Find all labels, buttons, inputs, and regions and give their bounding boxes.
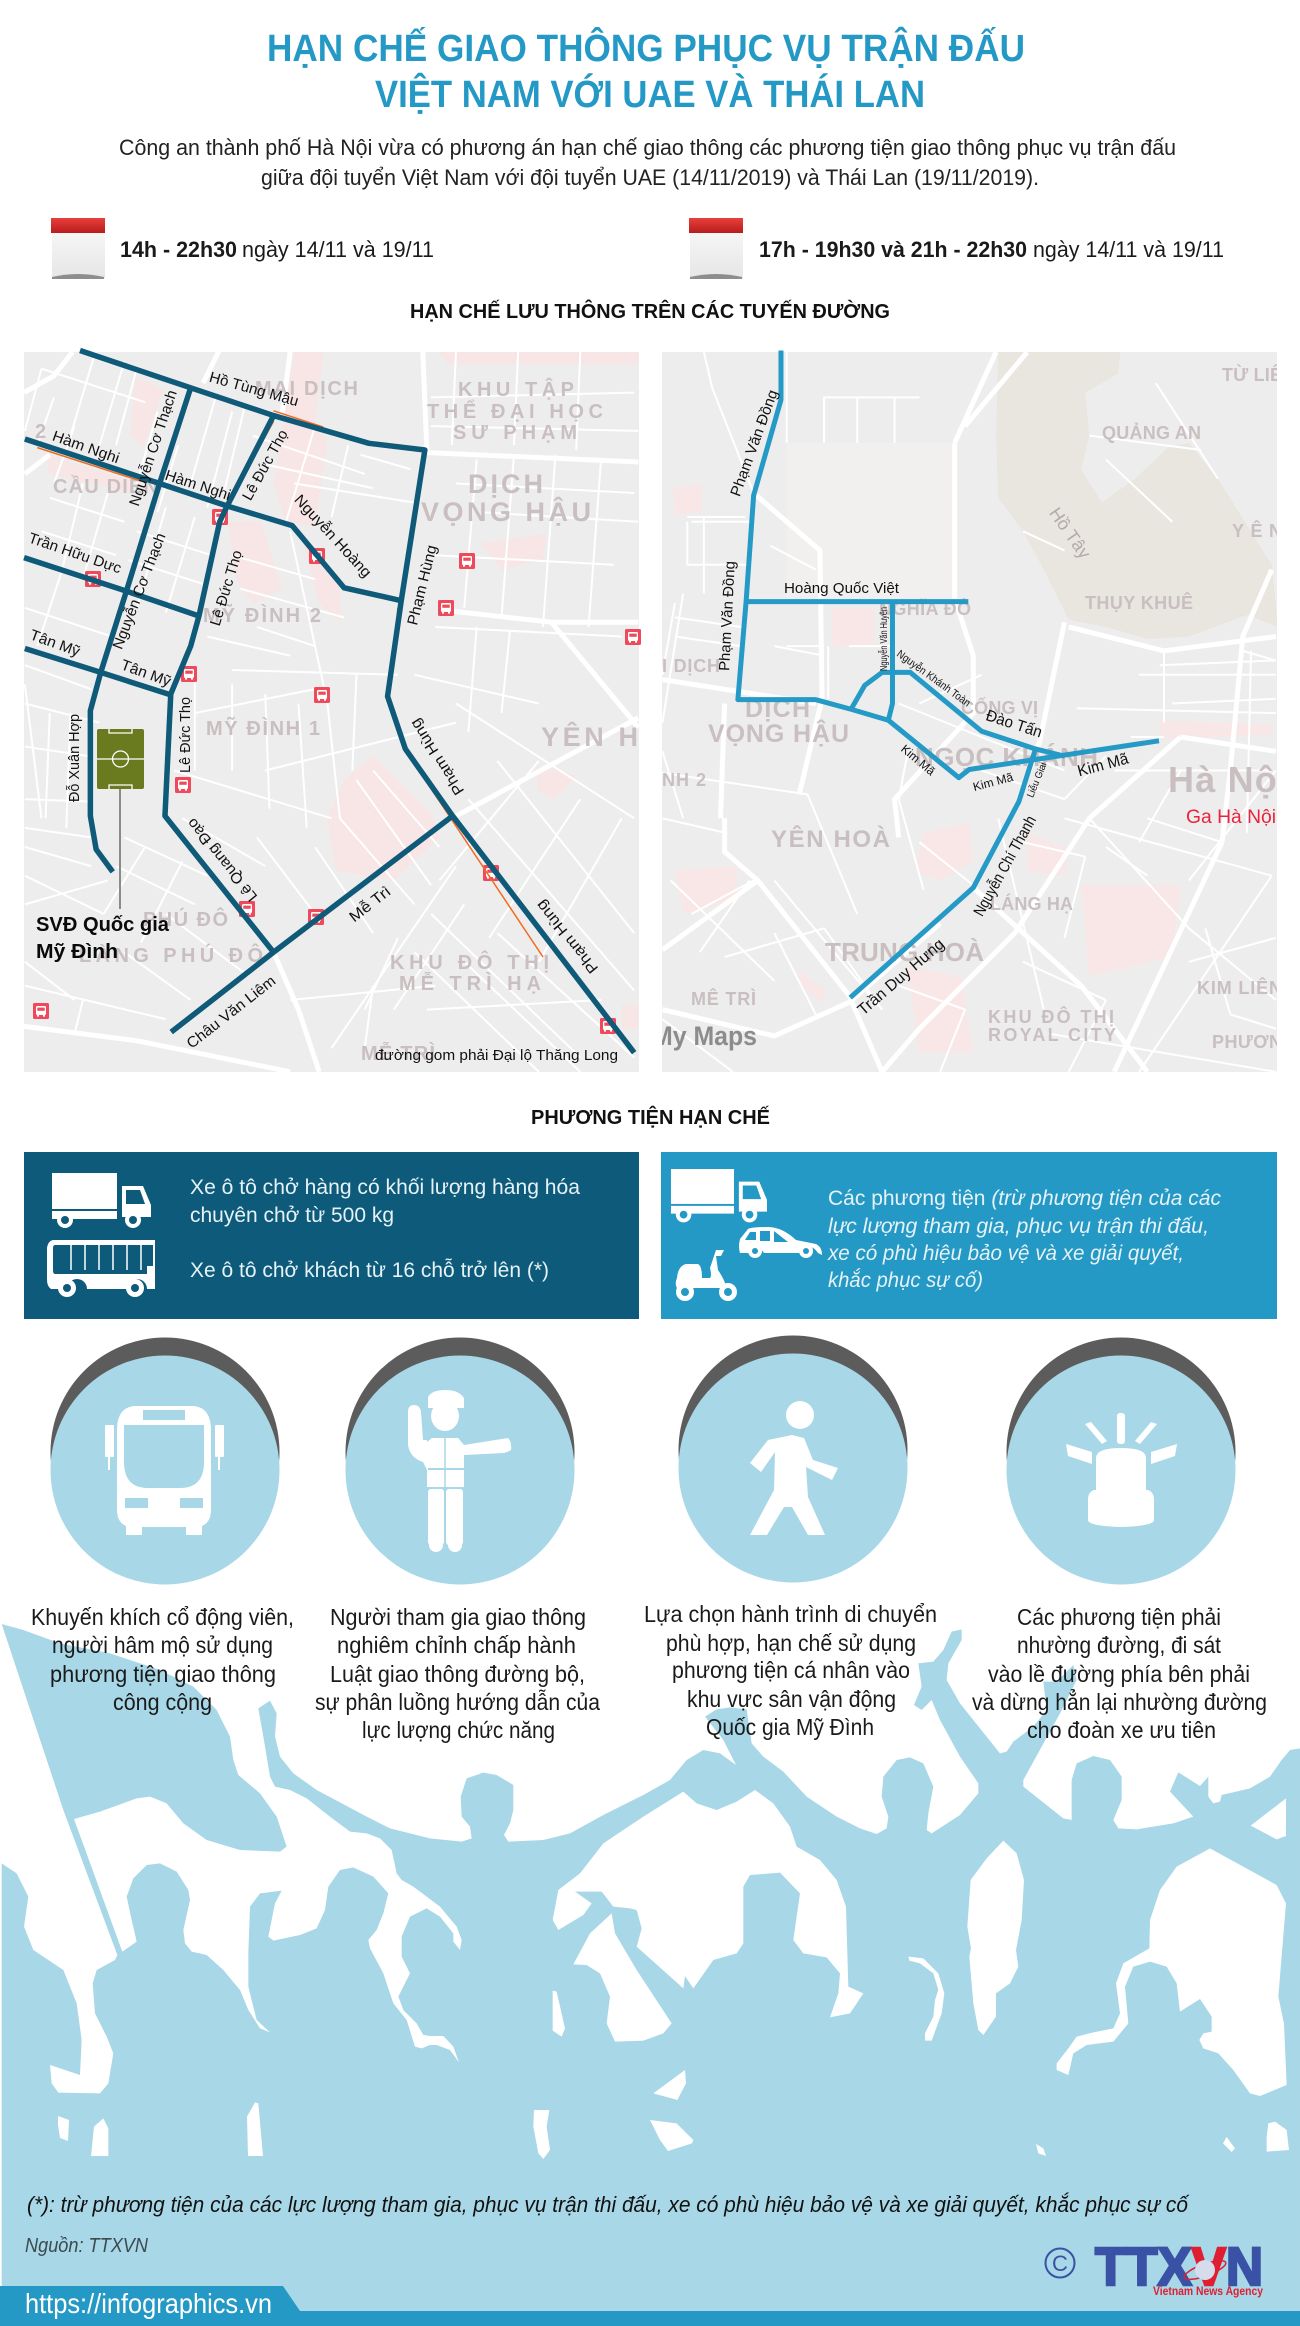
text: all vehicles except: khắc phục sự cố) xyxy=(828,1269,983,1292)
road labels: My Dinh map: Châu Văn Liêm xyxy=(184,972,279,1052)
title: VIỆT NAM VỚI UAE VÀ THÁI LAN xyxy=(375,72,925,116)
panel: map Cau Giay - Dong Da area: KHU ĐÔ THỊ xyxy=(988,1006,1114,1027)
crowd silhouette xyxy=(2,1624,1300,2326)
text: obey traffic law: sự phân luồng hướng dẫn của xyxy=(315,1689,600,1715)
footer bar with url: https://infographics.vn xyxy=(25,2288,272,2319)
text: all vehicles except xyxy=(827,1187,1221,1292)
text: trucks and coaches: Xe ô tô chở khách từ 16 chỗ trở lên (*) xyxy=(190,1259,549,1282)
title: HẠN CHẾ GIAO THÔNG PHỤC VỤ TRẬN ĐẤU xyxy=(267,25,1025,70)
panel: map Cau Giay - Dong Da area: LÁNG HẠ xyxy=(990,893,1073,914)
panel: map My Dinh area: VỌNG HẬU xyxy=(421,496,591,527)
road labels: My Dinh map: Lê Đức Thọ xyxy=(177,697,194,773)
time range left xyxy=(120,237,434,262)
road labels: Cau Giay map: Kim Mã xyxy=(1076,751,1131,780)
panel: dark vehicles xyxy=(24,1152,639,1319)
road labels: My Dinh map: Hàm Nghi xyxy=(163,467,233,504)
title xyxy=(267,25,1025,116)
panel: map Cau Giay - Dong Da area: NGỌC KHÁNH xyxy=(915,742,1098,772)
panel: map My Dinh area: MỄ TRÌ HẠ xyxy=(399,972,541,995)
panel: map Cau Giay - Dong Da area: Ga Hà Nội xyxy=(1186,807,1276,828)
icon: scooter xyxy=(676,1250,737,1301)
text: give way: nhường đường, đi sát xyxy=(1017,1632,1222,1658)
advice column: public transport xyxy=(31,1338,294,1715)
panel: map My Dinh area: THỂ ĐẠI HỌC xyxy=(427,400,603,423)
text: trucks and coaches: chuyên chở từ 500 kg xyxy=(190,1204,394,1227)
icon: truck xyxy=(671,1169,767,1222)
road labels: My Dinh map: Lê Quang Đạo xyxy=(184,815,261,905)
panel: map My Dinh area: 2 xyxy=(35,421,46,443)
panel: map Cau Giay - Dong Da area: YÊN HOÀ xyxy=(771,825,890,853)
road labels: Cau Giay map: Kim Mã xyxy=(898,742,938,778)
logo: TTXVN: Vietnam News Agency xyxy=(1153,2284,1263,2298)
road labels: Cau Giay map xyxy=(716,388,1131,1019)
stadium label: SVĐ Quốc gia xyxy=(36,914,170,936)
panel: map Cau Giay - Dong Da area: TỪ LIÊ xyxy=(1222,364,1282,385)
text: obey traffic law xyxy=(315,1604,600,1743)
road labels: Cau Giay map: Nguyễn Văn Huyên xyxy=(877,607,890,671)
panel: map Cau Giay - Dong Da area: QUẢNG AN xyxy=(1102,422,1201,443)
text: public transport: công cộng xyxy=(113,1689,212,1715)
road labels: Cau Giay map: Nguyễn Khánh Toàn xyxy=(894,647,973,710)
text: public transport: Khuyến khích cổ động viên, xyxy=(31,1604,294,1630)
road labels: My Dinh map: Tân Mỹ xyxy=(27,627,83,661)
logo: TTXVN: TTXVN xyxy=(1095,2237,1263,2297)
road labels: Cau Giay map: Đào Tấn xyxy=(984,707,1044,742)
panel: map My Dinh area: MỸ ĐÌNH 1 xyxy=(206,717,320,740)
text: give way: cho đoàn xe ưu tiên xyxy=(1027,1717,1216,1743)
road labels: Cau Giay map: Trần Duy Hưng xyxy=(855,936,948,1019)
road labels: Cau Giay map: Hoàng Quốc Việt xyxy=(784,580,900,597)
advice column: give way xyxy=(972,1338,1267,1743)
panel: map My Dinh area: MỄ TRÌ xyxy=(361,1042,435,1065)
footnote: (*): trừ phương tiện của các lực lượng tham gia, phục vụ trận thi đấu, xe có phù hiệu bảo vệ và xe giải quyết, khắc phục sự cố xyxy=(27,2192,1190,2217)
intro paragraph: Công an thành phố Hà Nội vừa có phương án hạn chế giao thông các phương tiện giao thông phục vụ trận đấu xyxy=(119,135,1176,160)
text: give way: Các phương tiện phải xyxy=(1017,1604,1221,1630)
panel: map My Dinh area: CẦU DIỄN xyxy=(53,475,158,498)
text: give way: vào lề đường phía bên phải xyxy=(988,1661,1250,1687)
time range right: 17h - 19h30 và 21h - 22h30 xyxy=(759,237,1027,262)
panel: map Cau Giay - Dong Da area: NH 2 xyxy=(662,770,706,790)
road labels: My Dinh map: Mễ Trì xyxy=(346,883,394,926)
icon: truck xyxy=(52,1173,151,1228)
panel: map Cau Giay - Dong Da area: KIM LIÊN xyxy=(1197,977,1282,998)
road labels: My Dinh map: Tân Mỹ xyxy=(118,657,174,691)
panel: map My Dinh area: LÀNG PHÚ ĐÔ xyxy=(79,943,263,967)
panel: map Cau Giay - Dong Da area: THỤY KHUÊ xyxy=(1085,592,1193,613)
road labels: My Dinh map xyxy=(26,369,618,1064)
road labels: My Dinh map: Lê Đức Thọ xyxy=(207,548,246,628)
text: give way: và dừng hẳn lại nhường đường xyxy=(972,1687,1267,1715)
icon: coach bus xyxy=(47,1240,155,1297)
panel: map Cau Giay - Dong Da area: MÊ TRÌ xyxy=(691,988,756,1009)
icon: bus front xyxy=(105,1406,224,1535)
icon: stadium xyxy=(97,729,144,909)
time range left: ngày 14/11 và 19/11 xyxy=(242,237,434,262)
panel: map My Dinh area: YÊN H xyxy=(541,721,638,752)
road labels: Cau Giay map: Liễu Giai xyxy=(1024,760,1049,799)
panel: map Cau Giay - Dong Da area: CỐNG VỊ xyxy=(961,697,1038,718)
text: public transport: phương tiện giao thông xyxy=(50,1661,276,1687)
text: plan route: Lựa chọn hành trình di chuyển xyxy=(644,1601,937,1627)
panel: map My Dinh area xyxy=(24,350,641,1072)
road labels: My Dinh map: Phạm Hùng xyxy=(407,715,468,798)
road labels: My Dinh map: Đỗ Xuân Hợp xyxy=(66,714,83,802)
panel: map Cau Giay - Dong Da area: YÊN xyxy=(1232,520,1282,541)
panel: map Cau Giay - Dong Da area: NGHĨA ĐÔ xyxy=(879,598,971,619)
text: plan route: phương tiện cá nhân vào xyxy=(672,1657,910,1683)
panel: map My Dinh area: DỊCH xyxy=(468,469,543,499)
panel: map My Dinh area: KHU ĐÔ THỊ xyxy=(390,950,549,974)
footer bar with url xyxy=(0,2286,1300,2326)
road labels: Cau Giay map: Phạm Văn Đồng xyxy=(716,561,739,671)
intro paragraph xyxy=(119,135,1176,190)
road labels: My Dinh map: Nguyễn Hoàng xyxy=(291,492,375,581)
panel: map My Dinh area: MAI DỊCH xyxy=(255,378,358,400)
panel: map Cau Giay - Dong Da area xyxy=(652,351,1288,1072)
heading: restricted routes: HẠN CHẾ LƯU THÔNG TRÊN CÁC TUYẾN ĐƯỜNG xyxy=(410,299,890,323)
source: Nguồn: TTXVN xyxy=(25,2235,149,2257)
road labels: My Dinh map: Phạm Hùng xyxy=(404,543,441,627)
icon: siren xyxy=(1066,1413,1177,1527)
text: obey traffic law: Người tham gia giao thông xyxy=(330,1604,586,1630)
panel: map My Dinh area: SƯ PHẠM xyxy=(453,422,577,444)
advice column: obey traffic law xyxy=(315,1338,600,1743)
icon: pedestrian xyxy=(750,1401,838,1535)
road labels: My Dinh map: Hồ Tùng Mậu xyxy=(207,369,300,410)
panel: light vehicles xyxy=(661,1152,1277,1319)
panel: map Cau Giay - Dong Da area: VỌNG HẬU xyxy=(708,718,849,748)
road labels: Cau Giay map: Kim Mã xyxy=(971,770,1015,794)
logo: TTXVN: C xyxy=(1052,2251,1068,2276)
bus stop markers xyxy=(33,509,641,1034)
text: all vehicles except: lực lượng tham gia, phục vụ trận thi đấu, xyxy=(828,1215,1209,1238)
icon: traffic officer xyxy=(408,1390,511,1552)
text: obey traffic law: nghiêm chỉnh chấp hành xyxy=(337,1632,576,1658)
panel: map Cau Giay - Dong Da area: Hà Nội xyxy=(1168,759,1288,800)
road labels: Cau Giay map: Nguyễn Chí Thanh xyxy=(969,812,1040,919)
icon: car xyxy=(739,1227,822,1258)
road labels: My Dinh map: Nguyễn Cơ Thạch xyxy=(126,388,181,508)
restricted roads xyxy=(738,351,1159,998)
stadium label xyxy=(36,914,170,963)
panel: map Cau Giay - Dong Da area: TRUNG HOÀ xyxy=(825,937,984,967)
icon: calendar left xyxy=(51,218,105,279)
panel: map Cau Giay - Dong Da area: My Maps xyxy=(652,1021,757,1051)
stadium label: Mỹ Đình xyxy=(36,941,118,963)
panel: map Cau Giay - Dong Da area: Hồ Tây xyxy=(1045,504,1095,562)
road labels: My Dinh map: đường gom phải Đại lộ Thăng Long xyxy=(375,1047,618,1064)
time range right: ngày 14/11 và 19/11 xyxy=(1033,237,1224,262)
panel: map Cau Giay - Dong Da area: I DỊCH xyxy=(662,656,720,676)
panel: map My Dinh area: MỸ ĐÌNH 2 xyxy=(203,604,321,627)
road labels: My Dinh map: Trần Hữu Dực xyxy=(26,530,124,577)
text: trucks and coaches: Xe ô tô chở hàng có khối lượng hàng hóa xyxy=(190,1176,580,1199)
panel: map Cau Giay - Dong Da area: ROYAL CITY xyxy=(988,1025,1116,1045)
text: public transport xyxy=(31,1604,294,1715)
text: trucks and coaches xyxy=(190,1176,580,1282)
panel: map My Dinh area: PHÚ ĐÔ xyxy=(143,907,228,931)
icon: calendar right xyxy=(689,218,743,279)
restricted roads xyxy=(24,351,634,1053)
time range right xyxy=(759,237,1224,262)
road labels: My Dinh map: Phạm Hùng xyxy=(533,897,602,977)
text: plan route: phù hợp, hạn chế sử dụng xyxy=(666,1630,916,1656)
road labels: My Dinh map: Lê Đức Thọ xyxy=(239,427,292,503)
advice column: plan route xyxy=(644,1336,937,1740)
panel: map Cau Giay - Dong Da area: DỊCH xyxy=(745,695,810,723)
text: all vehicles except: xe có phù hiệu bảo vệ và xe giải quyết, xyxy=(827,1242,1184,1265)
text: give way xyxy=(972,1604,1267,1743)
text: plan route: Quốc gia Mỹ Đình xyxy=(706,1714,874,1740)
panel: map Cau Giay - Dong Da area: PHƯƠN xyxy=(1212,1032,1282,1052)
road labels: My Dinh map: Nguyễn Cơ Thạch xyxy=(109,531,169,652)
time range left: 14h - 22h30 xyxy=(120,237,237,262)
road labels: Cau Giay map: Phạm Văn Đồng xyxy=(727,388,782,499)
road labels: My Dinh map: Hàm Nghi xyxy=(50,428,122,467)
heading: restricted vehicles: PHƯƠNG TIỆN HẠN CHẾ xyxy=(531,1105,770,1129)
text: plan route: khu vực sân vận động xyxy=(687,1686,896,1712)
text: obey traffic law: Luật giao thông đường bộ, xyxy=(330,1661,585,1687)
text: plan route xyxy=(644,1601,937,1740)
text: all vehicles except: Các phương tiện (trừ phương tiện của các xyxy=(828,1187,1221,1210)
text: obey traffic law: lực lượng chức năng xyxy=(362,1717,555,1743)
text: public transport: người hâm mộ sử dụng xyxy=(52,1632,273,1658)
intro paragraph: giữa đội tuyển Việt Nam với đội tuyển UAE (14/11/2019) và Thái Lan (19/11/2019). xyxy=(261,165,1039,190)
panel: map My Dinh area: KHU TẬP xyxy=(458,377,574,401)
